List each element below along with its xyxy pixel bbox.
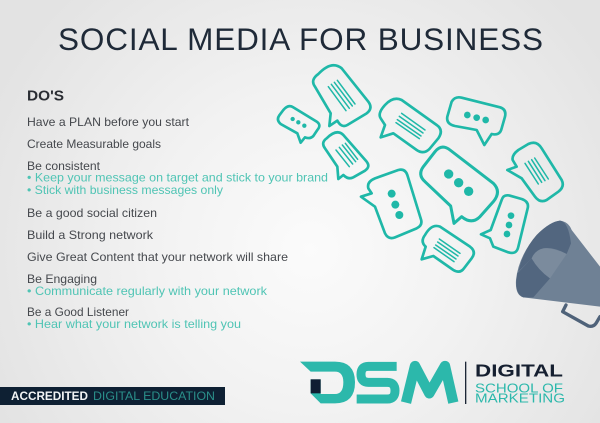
icon: right bubble with lines <box>507 143 563 201</box>
item: be engaging <box>27 272 268 298</box>
item: be consistent <box>27 159 328 197</box>
item: good listener: • Hear what your network is telling you <box>27 317 241 331</box>
logo text: DIGITAL <box>475 360 563 380</box>
logo mark: DSM <box>300 362 466 404</box>
banner: accredited digital education: DIGITAL EDUCATION <box>93 391 215 403</box>
panel: do's list <box>27 88 328 331</box>
logo: DSM digital school of marketing <box>300 360 565 406</box>
item: plan: Have a PLAN before you start <box>27 115 190 129</box>
heading: do's: DO'S <box>27 88 64 104</box>
banner: accredited digital education: ACCREDITED <box>11 391 88 403</box>
icon: wide bubble with dots <box>447 97 505 145</box>
logo: DSM digital school of marketing: MARKETING <box>475 390 565 406</box>
item: be engaging: Be Engaging <box>27 272 97 286</box>
item: be consistent: Be consistent <box>27 159 101 173</box>
icon: bottom bubble with lines <box>422 226 474 272</box>
icon: small bubble with lines <box>323 132 368 179</box>
item: be consistent: • Keep your message on target and stick to your brand <box>27 170 328 184</box>
icon: lower-left bubble with dots <box>361 170 421 238</box>
title: SOCIAL MEDIA FOR BUSINESS <box>58 21 543 57</box>
icon: large center bubble with dots <box>421 147 497 223</box>
item: great content: Give Great Content that your network will share <box>27 250 288 264</box>
item: good listener: Be a Good Listener <box>27 305 129 319</box>
item: goals: Create Measurable goals <box>27 137 161 151</box>
illustration: speech bubbles <box>278 65 563 272</box>
logo: DSM digital school of marketing: SCHOOL OF <box>475 380 563 396</box>
item: social citizen: Be a good social citizen <box>27 206 157 220</box>
item: strong network: Build a Strong network <box>27 228 154 242</box>
item: be consistent: • Stick with business messages only <box>27 183 223 197</box>
icon: tall bubble with lines <box>313 65 370 126</box>
item: be engaging: • Communicate regularly with your network <box>27 284 268 298</box>
icon: small bubble with dots <box>278 106 319 143</box>
banner: accredited digital education <box>0 387 225 405</box>
icon: wide bubble with lines <box>380 99 441 152</box>
icon: tall bubble near megaphone <box>481 195 528 253</box>
item: good listener <box>27 305 241 331</box>
icon: megaphone <box>516 221 600 326</box>
